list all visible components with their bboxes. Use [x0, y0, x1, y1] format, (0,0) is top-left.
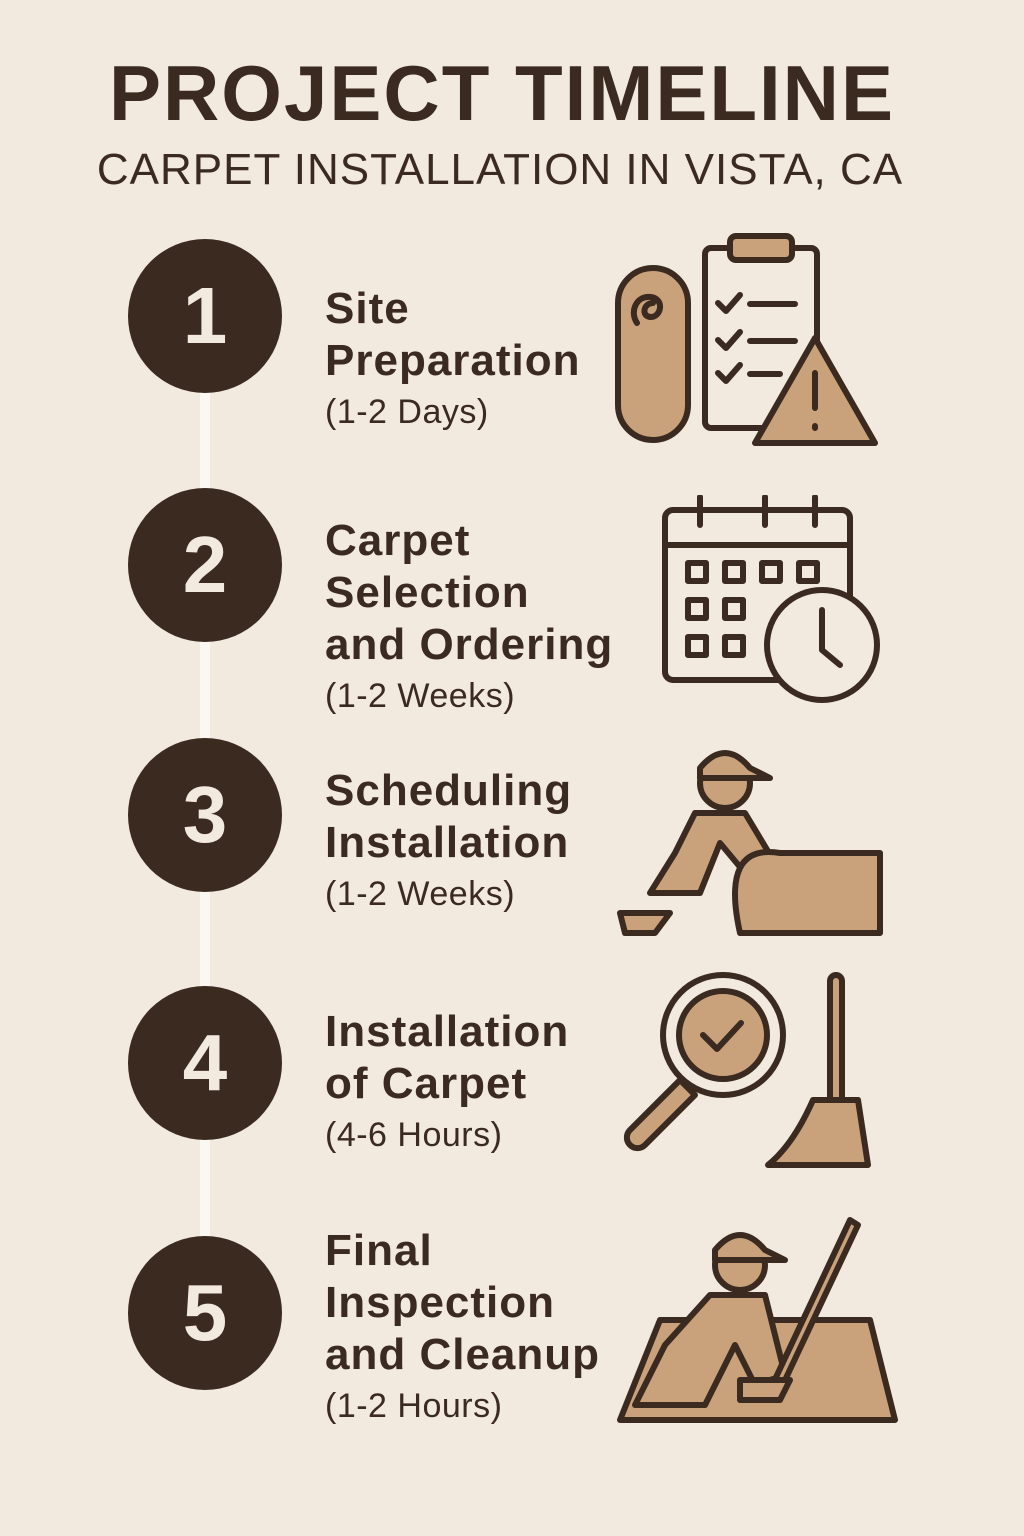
step 4 text: Installation [325, 1007, 569, 1056]
step 1 text [325, 284, 581, 431]
step 4 text: of Carpet [325, 1059, 527, 1108]
step 5 number: 5 [183, 1268, 227, 1357]
step 2 text: (1-2 Weeks) [325, 677, 515, 715]
step 1 number [128, 239, 282, 393]
step 2 text: Carpet [325, 516, 470, 565]
icon: worker cleaning carpet [617, 1217, 898, 1423]
icon: calendar clock [662, 495, 880, 703]
step 5 text: (1-2 Hours) [325, 1387, 502, 1425]
step 3 number: 3 [183, 770, 227, 859]
step 2 text: and Ordering [325, 620, 613, 669]
step 4 number: 4 [183, 1018, 227, 1107]
step 4 text [325, 1007, 569, 1154]
step 5 text: Inspection [325, 1278, 555, 1327]
step 3 number [128, 738, 282, 892]
timeline line [200, 320, 210, 1240]
step 5 text: Final [325, 1226, 433, 1275]
step 2 number: 2 [183, 520, 227, 609]
step 1 text: Preparation [325, 336, 581, 385]
step 4 text: (4-6 Hours) [325, 1116, 502, 1154]
step 3 text: Installation [325, 818, 569, 867]
step 4 number [128, 986, 282, 1140]
icon: magnifier and broom [624, 972, 871, 1168]
step 2 text: Selection [325, 568, 530, 617]
step 5 number [128, 1236, 282, 1390]
step 5 text: and Cleanup [325, 1330, 600, 1379]
step 5 text [325, 1226, 600, 1425]
subtitle: CARPET INSTALLATION IN VISTA, CA [97, 145, 903, 194]
step 2 number [128, 488, 282, 642]
step 2 text [325, 516, 613, 715]
step 1 text: (1-2 Days) [325, 393, 489, 431]
icon: worker installing carpet [617, 750, 883, 936]
title: PROJECT TIMELINE [109, 49, 895, 137]
step 3 text [325, 766, 572, 913]
step 3 text: Scheduling [325, 766, 572, 815]
step 1 text: Site [325, 284, 410, 333]
step 3 text: (1-2 Weeks) [325, 875, 515, 913]
icon: carpet roll checklist warning [615, 233, 878, 446]
step 1 number: 1 [183, 271, 227, 360]
